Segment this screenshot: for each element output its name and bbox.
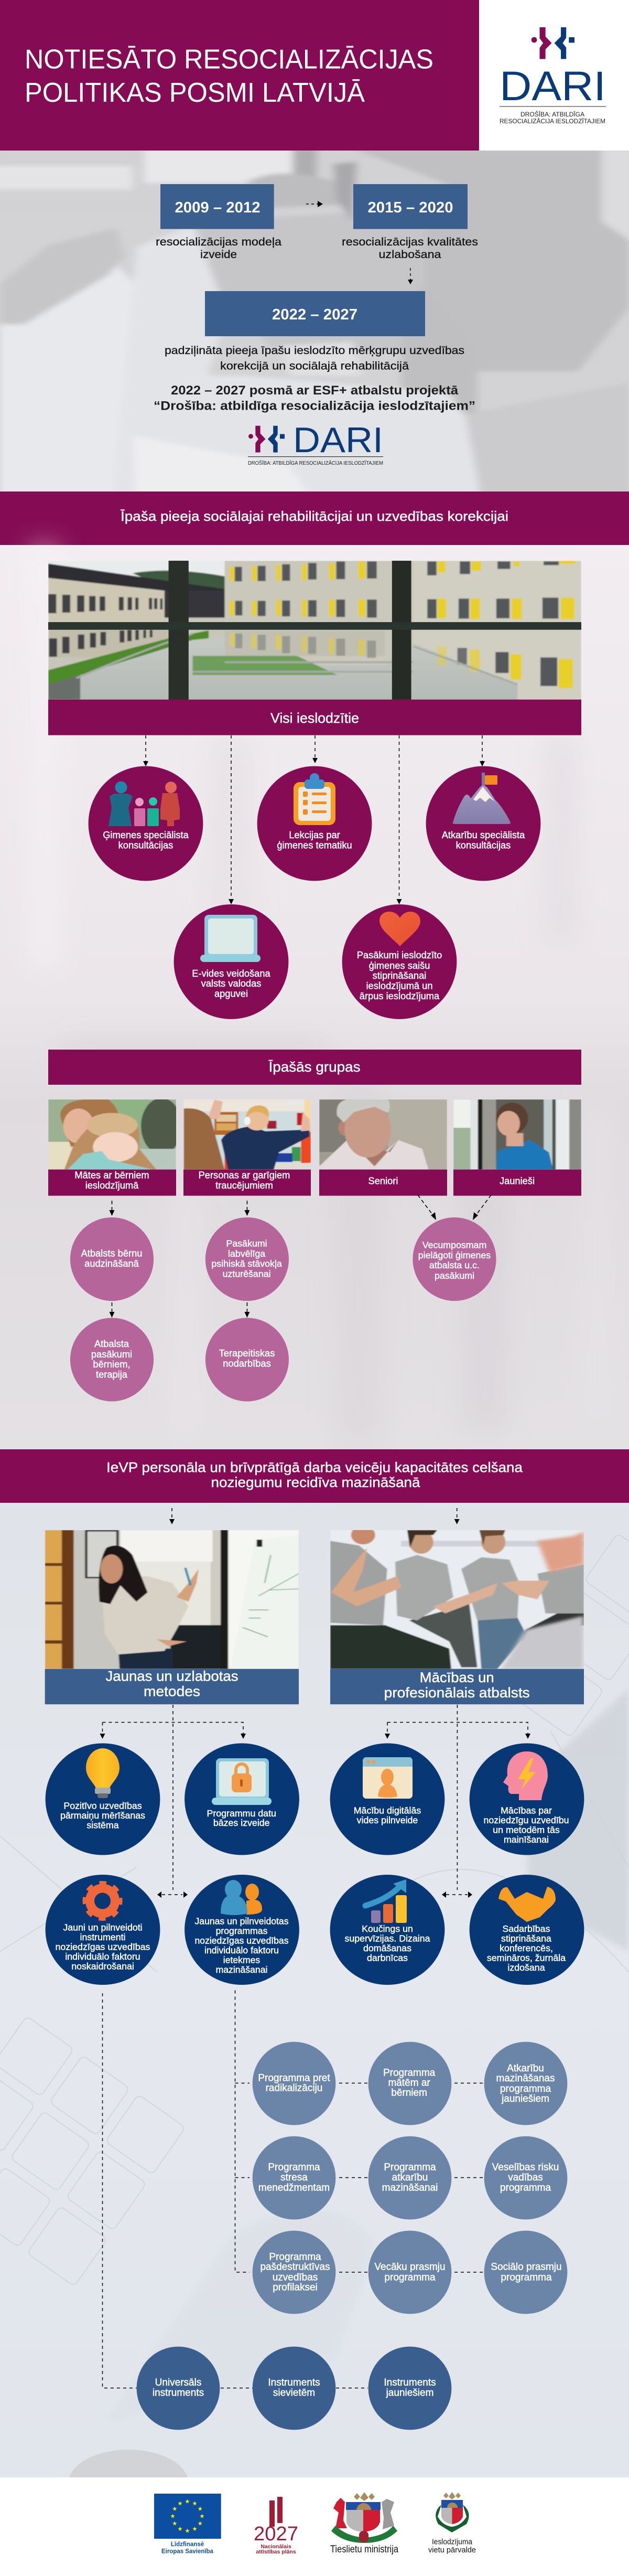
circle: youth addiction programme: jauniešiem [501, 2093, 549, 2104]
circle: youth addiction programme: programma [500, 2083, 551, 2094]
caption: mental disorders [183, 1169, 311, 1196]
label: konferencēs, [500, 1943, 553, 1953]
circle: criminal behaviour training [470, 1744, 584, 1855]
logo: prison administration [428, 2492, 476, 2554]
logo panel: DARI [479, 0, 629, 151]
label: supervīzijas. Dizaina [344, 1933, 430, 1944]
circle: anti-radicalisation programme [253, 2042, 335, 2125]
band: special groups [48, 1050, 581, 1085]
logo: prison administration: vietu pārvalde [428, 2546, 476, 2554]
icon: heart [379, 912, 420, 946]
circle: self-destructive programme: profilaksei [273, 2282, 318, 2293]
logo: ministry of justice: Tieslietu ministrija [330, 2544, 398, 2555]
circle: social skills programme [484, 2231, 567, 2314]
circle: self-destructive programme: Programma [269, 2252, 321, 2263]
circle: age-adapted [413, 1217, 496, 1301]
icon: growth chart [365, 1879, 407, 1923]
label: valsts valodas [201, 978, 261, 989]
caption: new methods: metodes [144, 1684, 200, 1699]
circle: mental state [205, 1217, 289, 1301]
circle: age-adapted: atbalsta u.c. [429, 1260, 480, 1270]
logo: EU co-funding: Līdzfinansē [171, 2541, 204, 2548]
circle: social skills programme: programma [501, 2272, 552, 2283]
circle: social skills programme: Sociālo prasmju [491, 2262, 562, 2273]
circle: e-learning [174, 904, 288, 1019]
circle: universal instrument: instruments [153, 2388, 204, 2399]
label: Mācības par [501, 1805, 552, 1815]
label: vides pilnveide [357, 1815, 418, 1825]
logo: EU co-funding: Eiropas Savienība [161, 2548, 214, 2554]
circle: family ties events [342, 904, 457, 1019]
circle: self-destructive programme: pašdestruktīvas [260, 2262, 330, 2273]
header band [0, 0, 479, 151]
icon: people [221, 1880, 262, 1915]
band: special groups: Īpašās grupas [268, 1059, 361, 1075]
logo: DARI small: DARI [293, 420, 383, 460]
circle: stress programme: stresa [280, 2172, 308, 2183]
caption: seniors: Seniori [368, 1175, 398, 1187]
circle: addiction programme: Programma [384, 2162, 436, 2173]
label: Ģimenes speciālista [103, 829, 189, 840]
circle: instrument for women [253, 2347, 335, 2430]
label: noziedzīgu uzvedību [483, 1815, 569, 1825]
circle: digital learning [330, 1744, 444, 1855]
circle: age-adapted: pasākumi [435, 1270, 474, 1281]
label: stiprināšana [501, 1933, 551, 1944]
banner: staff capacity [0, 1449, 629, 1503]
circle: anti-radicalisation programme: radikalizāciju [266, 2082, 322, 2094]
caption: mothers: Mātes ar bērniem [74, 1169, 149, 1180]
circle: parenting support: Atbalsts bērnu [81, 1247, 142, 1258]
caption: youth [453, 1170, 581, 1196]
label: apguvei [214, 988, 248, 999]
connectors: branch right [385, 1705, 530, 1898]
label: Lekcijas par [289, 829, 340, 840]
circle: self-destructive programme [253, 2231, 335, 2314]
timeline: 2015-2020 [353, 184, 468, 229]
circle: parenting programme: programma [384, 2272, 436, 2283]
label: bāzes izveide [213, 1818, 270, 1828]
text: deepened approach: padziļināta pieeja īpašu ieslodzīto mērķgrupu uzvedības [165, 344, 464, 357]
icon: lock on laptop [212, 1758, 272, 1805]
title: NOTIESĀTO RESOCIALIZĀCIJAS [25, 44, 433, 74]
caption: new methods: Jaunas un uzlabotas [106, 1668, 238, 1684]
circle: instrument for youth: jauniešiem [386, 2388, 433, 2399]
circle: children support: Atbalsta [94, 1338, 129, 1349]
logo panel: DARI: DARI [500, 62, 606, 109]
circle: universal instrument: Universāls [155, 2377, 201, 2388]
connectors: branch left [100, 1705, 246, 1898]
circle: mental state: Pasākumi [226, 1238, 267, 1248]
background: pink section [0, 545, 629, 1449]
arrow: 2009 to 2015 [306, 201, 323, 207]
timeline: 2009-2012: 2009 – 2012 [175, 199, 260, 216]
circle: youth addiction programme: Atkarību [507, 2063, 544, 2074]
text: deepened approach: korekcijā un sociālajā rehabilitācijā [220, 360, 409, 372]
logo: ministry of justice [330, 2492, 398, 2555]
label: semināros, žurnāla [487, 1953, 566, 1963]
logo: prison administration: Ieslodzījuma [432, 2538, 473, 2546]
arrows: groups to pink circles [109, 1195, 491, 1318]
label: ģimenes tematiku [277, 840, 352, 851]
label: mazināšanai [216, 1964, 267, 1975]
label: Pasākumi ieslodzīto [357, 949, 442, 960]
photo: youth [453, 1099, 581, 1170]
label: domāšanas [363, 1943, 411, 1953]
label: individuālo faktoru [204, 1945, 279, 1955]
circle: cooperation [470, 1875, 584, 1985]
label: Pozitīvo uzvedības [63, 1800, 142, 1811]
banner: special approach [0, 491, 629, 545]
caption: training: Mācības un [420, 1670, 494, 1685]
circle: addiction programme [368, 2136, 451, 2219]
label: noziedzīgas uzvedības [195, 1936, 289, 1946]
icon: light bulb [86, 1748, 120, 1798]
banner: staff capacity: noziegumu recidīva mazināšanā [211, 1474, 421, 1490]
label: konsultācijas [456, 840, 511, 851]
timeline: 2009-2012 [160, 184, 274, 229]
photo: teacher at whiteboard [45, 1530, 299, 1669]
icon: browser window with person [363, 1757, 413, 1799]
text: model: resocializācijas modeļa [156, 236, 281, 248]
circle: mothers programme: Programma [383, 2068, 436, 2079]
photo: person with headphones [183, 1099, 311, 1170]
band: all inmates: Visi ieslodzītie [270, 710, 359, 726]
caption: training: profesionālais atbalsts [384, 1685, 530, 1701]
label: noskaidrošanai [71, 1961, 134, 1972]
circle: stress programme [253, 2136, 335, 2219]
photo: mother with child [48, 1099, 176, 1170]
footer band [0, 2477, 629, 2576]
circle: self-destructive programme: uzvedības [273, 2272, 318, 2283]
icon: laptop [200, 915, 261, 962]
circle: children support [70, 1318, 154, 1402]
icon: head with bolt [503, 1751, 548, 1800]
caption: youth: Jaunieši [500, 1175, 535, 1187]
label: Atkarību speciālista [442, 829, 525, 840]
label: Jaunas un pilnveidotas [195, 1916, 289, 1926]
label: ietekmes [223, 1954, 260, 1965]
photo: support group [330, 1530, 584, 1669]
label: instrumenti [80, 1932, 125, 1942]
logo: national development plan 2027 [254, 2497, 298, 2555]
circle: parenting support: audzināšanā [84, 1258, 139, 1269]
circle: therapy: Terapeitiskas [219, 1348, 275, 1359]
banner: special approach: Īpaša pieeja sociālajai rehabilitācijai un uzvedības korekcijai [121, 508, 508, 524]
circle: stress programme: menedžmentam [258, 2182, 330, 2194]
circle: mothers programme: mātēm ar [388, 2078, 430, 2089]
circle: health risk programme: vadības [508, 2172, 543, 2183]
circle: new instruments [46, 1875, 160, 1985]
circle: coaching [330, 1875, 444, 1985]
circle: mental state: uzturēšanai [223, 1269, 271, 1279]
circle: therapy: nodarbības [223, 1358, 271, 1369]
label: programmas [216, 1926, 268, 1936]
circle: addiction specialist [426, 766, 540, 881]
circle: stress programme: Programma [268, 2162, 320, 2173]
arrows: all inmates to circles [143, 735, 485, 904]
text: model: izveide [200, 248, 237, 261]
circle: children support: pasākumi [91, 1349, 132, 1360]
circle: universal instrument [137, 2347, 220, 2430]
circle: new programmes [185, 1875, 299, 1985]
icon: clipboard [294, 773, 335, 825]
timeline: 2022-2027: 2022 – 2027 [272, 306, 357, 323]
circle: therapy [205, 1318, 289, 1402]
title [25, 44, 433, 108]
text: quality: uzlabošana [378, 248, 441, 261]
circle: youth addiction programme: mazināšanas [496, 2073, 555, 2084]
caption: mental disorders: traucējumiem [215, 1180, 273, 1191]
text: model [156, 236, 281, 261]
timeline: 2015-2020: 2015 – 2020 [368, 199, 453, 216]
label: ieslodzījumā un [366, 980, 433, 991]
caption: mothers [48, 1169, 176, 1196]
circle: parenting programme: Vecāku prasmju [374, 2262, 446, 2273]
title: POLITIKAS POSMI LATVIJĀ [25, 77, 365, 108]
circle: health risk programme: programma [500, 2182, 551, 2194]
photo: prison [48, 561, 581, 700]
circle: youth addiction programme [484, 2042, 567, 2125]
logo: national development plan 2027: attīstības plāns [256, 2549, 296, 2555]
circle: instrument for women: sievietēm [273, 2388, 315, 2399]
text: project [154, 383, 475, 413]
arrow: 2015 to 2022 [408, 268, 413, 284]
background: blue keyboard section [0, 1503, 629, 2518]
circle: age-adapted: pielāgoti ģimenes [418, 1250, 491, 1260]
logo: national development plan 2027: Nacionālais [261, 2543, 291, 2550]
icon: handshake [498, 1887, 556, 1922]
circle: instrument for women: Instruments [268, 2377, 320, 2388]
circle: mothers programme: bērniem [391, 2088, 427, 2099]
label: izdošana [507, 1962, 545, 1973]
caption: new methods [45, 1668, 299, 1704]
label: Programmu datu [207, 1808, 276, 1819]
text: quality [342, 236, 478, 261]
circle: health risk programme [484, 2136, 567, 2219]
caption: seniors [319, 1170, 447, 1196]
caption: mothers: ieslodzījumā [85, 1180, 139, 1191]
circle: mental state: psihiskā stāvokļa [211, 1258, 282, 1269]
caption: training [330, 1669, 584, 1704]
circle: addiction programme: mazināšanai [382, 2182, 438, 2194]
logo: DARI small: DROŠĪBA: ATBILDĪGA RESOCIALIZĀCIJA IESLODZĪTAJIEM [248, 459, 383, 466]
text: project: “Drošība: atbildīga resocializācija ieslodzītajiem” [154, 399, 475, 413]
text: project: 2022 – 2027 posmā ar ESF+ atbalstu projektā [171, 383, 459, 398]
logo: national development plan 2027: 2027 [254, 2523, 298, 2545]
circle: family specialist [89, 766, 203, 881]
circle: mothers programme [368, 2042, 451, 2125]
logo panel: DARI: DROŠĪBA: ATBILDĪGA [520, 111, 584, 118]
logo panel: DARI: RESOCIALIZĀCIJA IESLODZĪTAJIEM [500, 119, 605, 125]
label: E-vides veidošana [192, 968, 271, 979]
caption: mental disorders: Personas ar garīgiem [199, 1169, 290, 1180]
label: pārmaiņu mērīšanas [60, 1810, 145, 1821]
label: darbnīcas [367, 1953, 408, 1963]
label: Jauni un pilnveidoti [63, 1922, 143, 1933]
arrows: banner to branches [169, 1508, 460, 1524]
logo: EU co-funding [154, 2494, 221, 2554]
banner: staff capacity: IeVP personāla un brīvprātīgā darba veicēju kapacitātes celšana [106, 1460, 523, 1476]
label: un metodēm tās [493, 1824, 560, 1835]
label: noziedzīgas uzvedības [56, 1942, 150, 1952]
icon: gear [85, 1883, 121, 1919]
text: deepened approach [165, 344, 464, 372]
text: quality: resocializācijas kvalitātes [342, 236, 478, 248]
label: ārpus ieslodzījuma [360, 990, 440, 1001]
circle: addiction programme: atkarību [392, 2172, 428, 2183]
circle: health risk programme: Veselības risku [492, 2162, 559, 2173]
label: sistēma [86, 1820, 119, 1831]
circle: children support: terapija [96, 1369, 128, 1380]
circle: mental state: labvēlīga [228, 1248, 265, 1259]
photo: senior [319, 1099, 447, 1170]
label: mainīšanai [504, 1834, 549, 1845]
circle: anti-radicalisation programme: Programma pret [258, 2072, 330, 2083]
circle: age-adapted: Vecumposmam [422, 1240, 486, 1250]
icon: family [109, 782, 180, 826]
circle: family lectures [257, 766, 372, 881]
circle: parenting programme [368, 2231, 451, 2314]
connectors: instruments and programmes [103, 1990, 484, 2388]
label: Mācību digitālās [354, 1805, 421, 1815]
label: individuālo faktoru [65, 1951, 140, 1962]
timeline: 2022-2027 [205, 291, 425, 336]
label: Koučings un [362, 1923, 413, 1934]
circle: instrument for youth: Instruments [384, 2377, 436, 2388]
circle: parenting support [70, 1217, 154, 1301]
logo: DARI small [248, 420, 383, 466]
icon: mountain [453, 773, 511, 824]
label: stiprināšanai [373, 970, 426, 981]
circle: behaviour measurement [46, 1744, 160, 1855]
circle: programme database [185, 1744, 299, 1855]
background: grey blurred photo section [0, 151, 629, 491]
label: konsultācijas [118, 840, 173, 851]
band: all inmates [48, 700, 581, 735]
circle: instrument for youth [368, 2347, 451, 2430]
label: Sadarbības [503, 1923, 550, 1934]
circle: children support: bērniem, [93, 1359, 131, 1370]
label: ģimenes saišu [369, 960, 430, 971]
